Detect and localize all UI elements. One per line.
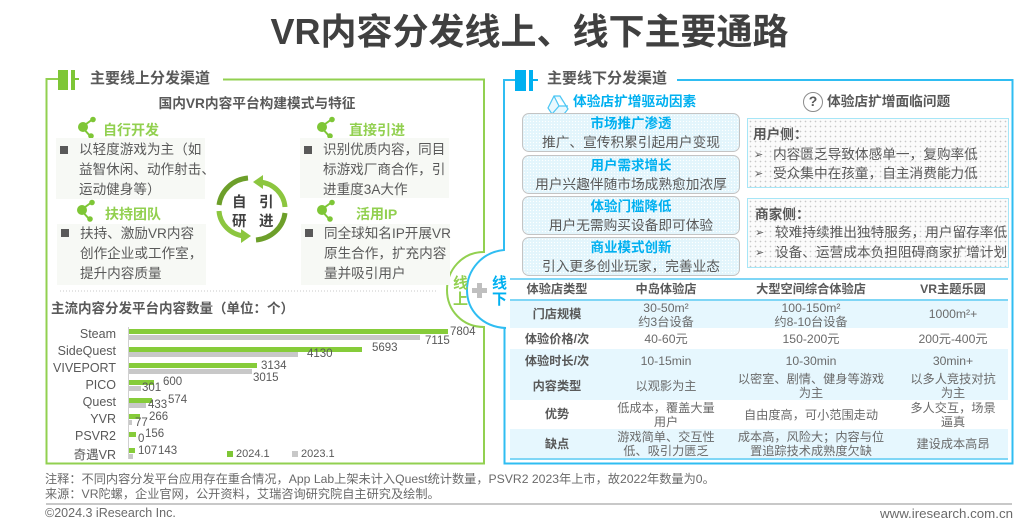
heading: support teams: 扶持团队 — [105, 206, 161, 222]
text: direct import — [300, 138, 449, 198]
text: direct import: 进重度3A大作 — [323, 182, 408, 197]
card: business innovation: 商业模式创新 — [590, 240, 672, 255]
table header: VR主题乐园 — [920, 282, 986, 296]
label: online — [453, 275, 468, 308]
row: advantages: 逼真 — [941, 415, 965, 429]
heading: self development: 自行开发 — [103, 122, 159, 138]
chart value labels: 156 — [145, 428, 164, 440]
card: lower barrier — [522, 196, 740, 235]
row: disadvantages: 成本高，风险大；内容与位 — [738, 430, 884, 444]
chart legend: 2023.1 — [301, 448, 335, 460]
text: self development: 运动健身等） — [79, 182, 161, 197]
text: support teams: 扶持、激励VR内容 — [80, 226, 194, 241]
row: content type: 为主 — [941, 386, 965, 400]
text: self development — [56, 138, 205, 199]
row: disadvantages: 低、吸引力匮乏 — [623, 444, 709, 458]
card: market promotion: 推广、宣传积累引起用户变现 — [542, 135, 720, 150]
chart value labels: 143 — [158, 445, 177, 457]
chart value labels: 301 — [142, 382, 161, 394]
row: store scale — [533, 301, 977, 329]
row: advantages: 优势 — [545, 407, 569, 421]
row: store scale: 100-150m² — [782, 301, 840, 315]
chart value labels: 3015 — [253, 372, 279, 384]
text: licensed IP: 同全球知名IP开展VR — [324, 226, 451, 241]
chart value labels — [135, 326, 476, 457]
chart category labels: Steam — [80, 327, 116, 341]
row: store scale: 约3台设备 — [638, 315, 694, 329]
callout: merchant side: ➢ — [755, 227, 764, 239]
icon: share node 1 — [78, 116, 96, 138]
row: content type: 以密室、剧情、健身等游戏 — [738, 372, 884, 386]
row: duration — [525, 354, 973, 368]
row: content type: 为主 — [799, 386, 823, 400]
text: licensed IP: 原生合作，扩充内容 — [324, 246, 446, 261]
chart value labels: 107 — [138, 445, 157, 457]
row: content type: 以观影为主 — [636, 379, 696, 393]
panel: offline channels — [466, 70, 1014, 464]
chart category labels — [53, 327, 116, 462]
row: advantages: 低成本，覆盖大量 — [617, 401, 715, 415]
online and offline emblem — [453, 275, 507, 308]
bar chart: axis — [128, 327, 129, 459]
card: business innovation — [522, 237, 740, 276]
card: user demand: 用户兴趣伴随市场成熟愈加浓厚 — [535, 177, 727, 192]
footnotes — [45, 472, 715, 501]
row: advantages: 用户 — [654, 415, 678, 429]
label: online: 上 — [453, 291, 468, 308]
callout: user side: 内容匮乏导致体感单一，复购率低 — [773, 147, 978, 162]
callout: user side: 受众集中在孩童，自主消费能力低 — [773, 166, 978, 181]
callout: merchant side: 较难持续推出独特服务，用户留存率低 — [775, 225, 1007, 240]
row: disadvantages: 建设成本高昂 — [916, 437, 990, 451]
subheading: platform models: 国内VR内容平台构建模式与特征 — [159, 96, 355, 111]
callout: merchant side: 商家侧： — [755, 207, 810, 222]
row: disadvantages: 游戏简单、交互性 — [617, 430, 715, 444]
icon: cycle arrows — [216, 175, 288, 243]
title: VR内容分发线上、线下主要通路 — [270, 11, 788, 52]
card: lower barrier: 体验门槛降低 — [590, 199, 672, 214]
heading: online channels: 主要线上分发渠道 — [90, 70, 210, 87]
label: self research and import: 引 — [259, 195, 274, 211]
chart value labels: 266 — [149, 411, 168, 423]
row: price: 150-200元 — [783, 332, 839, 346]
text: self development: 以轻度游戏为主（如 — [79, 142, 201, 157]
text: licensed IP — [301, 224, 450, 285]
chart category labels: VIVEPORT — [53, 361, 116, 375]
row: advantages — [545, 401, 996, 429]
row: advantages: 多人交互，场景 — [910, 401, 996, 415]
label: online: 线 — [453, 275, 468, 292]
chart bars 2024.1 — [129, 329, 448, 453]
row: advantages: 自由度高，可小范围走动 — [744, 408, 878, 422]
chart category labels: SideQuest — [58, 344, 116, 358]
footnotes: 注释：不同内容分发平台应用存在重合情况，App Lab上架未计入Quest统计数量，PSVR2 2023年上市，故2022年数量为0。 — [45, 472, 715, 486]
callout: user side — [747, 118, 1009, 188]
row: content type: 内容类型 — [533, 379, 581, 393]
chart value labels: 433 — [148, 399, 167, 411]
callout: merchant side — [747, 198, 1009, 268]
card: market promotion: 市场推广渗透 — [590, 116, 672, 131]
card: user demand: 用户需求增长 — [590, 158, 672, 173]
label: self research and import: 研 — [232, 214, 246, 230]
text: support teams: 提升内容质量 — [80, 266, 162, 281]
chart category labels: Quest — [83, 395, 116, 409]
chart value labels: 4130 — [307, 348, 333, 360]
table header: 体验店类型 — [527, 282, 587, 296]
row: content type: 以多人竞技对抗 — [910, 372, 996, 386]
heading: direct import: 直接引进 — [349, 122, 405, 138]
row: store scale: 30-50m² — [643, 301, 689, 315]
label: offline: 线 — [492, 275, 507, 292]
icon: share node 3 — [77, 200, 95, 222]
text: licensed IP: 量并吸引用户 — [324, 266, 406, 281]
panel: online channels — [46, 70, 485, 464]
footer left: copyright: ©2024.3 iResearch Inc. — [45, 506, 176, 520]
row: price — [525, 332, 988, 346]
chart value labels: 600 — [163, 376, 182, 388]
chart category labels: PSVR2 — [75, 429, 116, 443]
chart category labels: PICO — [85, 378, 116, 392]
footer rule — [46, 503, 1012, 505]
table header: 大型空间综合体验店 — [756, 282, 866, 296]
callout: user side: 用户侧： — [753, 127, 808, 142]
row: duration: 30min+ — [933, 354, 973, 368]
table header — [526, 282, 986, 296]
label: self research and import: 进 — [259, 214, 274, 230]
row: disadvantages: 置追踪技术成熟度欠缺 — [750, 444, 872, 458]
card: market promotion — [522, 113, 740, 152]
row: duration: 体验时长/次 — [525, 354, 589, 368]
footnotes: 来源：VR陀螺，企业官网，公开资料，艾瑞咨询研究院自主研究及绘制。 — [45, 487, 440, 501]
card: user demand — [522, 155, 740, 194]
panel frame: online — [46, 70, 485, 464]
text: support teams — [57, 224, 206, 285]
card: lower barrier: 用户无需购买设备即可体验 — [549, 218, 713, 233]
heading: drivers: 体验店扩增驱动因素 — [573, 94, 696, 109]
card: business innovation: 引入更多创业玩家，完善业态 — [542, 259, 720, 274]
table: store types — [510, 278, 1008, 460]
chart value labels: 5693 — [372, 342, 398, 354]
panel frame: offline — [466, 70, 1014, 464]
row: store scale: 门店规模 — [533, 307, 581, 321]
icon: question mark — [803, 92, 823, 112]
chart value labels: 574 — [168, 394, 187, 406]
chart category labels: 奇遇VR — [74, 448, 116, 462]
row: store scale: 1000m²+ — [929, 307, 977, 321]
chart bars 2023.1 — [129, 335, 420, 459]
icon: triangle — [547, 95, 569, 113]
icon: share node 4 — [317, 200, 335, 222]
row: store scale: 约8-10台设备 — [774, 315, 848, 329]
text: direct import: 识别优质内容，同目 — [323, 142, 445, 157]
icon: plus — [472, 283, 487, 298]
chart value labels: 3134 — [261, 360, 287, 372]
chart legend: 2024.1 — [236, 448, 270, 460]
chart legend — [227, 448, 335, 460]
row: duration: 10-30min — [786, 354, 836, 368]
text: self development: 益智休闲、动作射击、 — [79, 162, 215, 177]
row: duration: 10-15min — [641, 354, 691, 368]
heading: licensed IP: 活用IP — [356, 206, 397, 222]
label: offline — [492, 275, 507, 308]
table row bands — [510, 278, 1008, 460]
text: support teams: 创作企业或工作室， — [80, 246, 202, 261]
heading: offline channels: 主要线下分发渠道 — [547, 70, 667, 87]
row: disadvantages: 缺点 — [545, 437, 569, 451]
label: self research and import — [232, 194, 274, 230]
label: self research and import: 自 — [232, 195, 246, 211]
chart title: 主流内容分发平台内容数量（单位：个） — [51, 301, 294, 316]
heading: problems: 体验店扩增面临问题 — [827, 94, 950, 109]
chart category labels: YVR — [90, 412, 116, 426]
chart value labels: 7804 — [450, 326, 476, 338]
footer right: website: www.iresearch.com.cn — [880, 506, 1013, 521]
row: price: 40-60元 — [644, 332, 688, 346]
chart value labels: 77 — [135, 417, 148, 429]
callout: merchant side: 设备、运营成本负担阻碍商家扩增计划 — [775, 245, 1007, 260]
icon: share node 2 — [317, 116, 335, 138]
callout: merchant side: ➢ — [755, 247, 764, 259]
chart value labels: 7115 — [425, 335, 450, 347]
text: direct import: 标游戏厂商合作，引 — [323, 162, 445, 177]
callout: user side: ➢ — [754, 149, 763, 161]
row: price: 200元-400元 — [918, 332, 988, 346]
chart value labels: 0 — [138, 433, 144, 445]
callout: user side: ➢ — [754, 168, 763, 180]
icon: question mark: ? — [809, 93, 817, 109]
row: content type — [533, 372, 996, 400]
row: price: 体验价格/次 — [525, 332, 589, 346]
row: disadvantages — [545, 430, 990, 458]
label: offline: 下 — [492, 291, 507, 308]
table header: 中岛体验店 — [636, 282, 696, 296]
